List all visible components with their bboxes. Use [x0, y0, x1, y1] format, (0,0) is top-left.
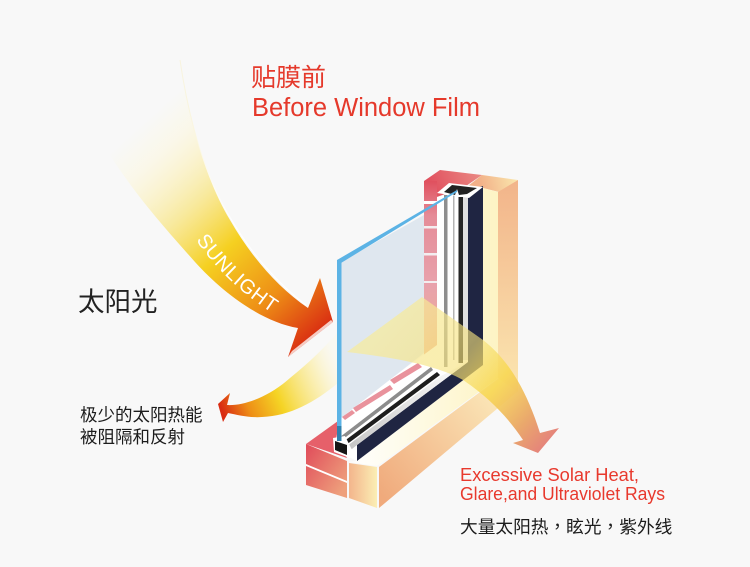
sill long face [379, 366, 517, 508]
cream strip [349, 188, 498, 466]
label: transmitted heat english [460, 465, 665, 504]
title: before window film [251, 64, 480, 122]
sill front orange [349, 463, 377, 508]
top profile [437, 183, 483, 198]
sunlight label: SUNLIGHT [198, 234, 280, 310]
frame top face orange [468, 175, 518, 192]
sill front brick [306, 444, 347, 498]
title: before window film: Before Window Film [252, 94, 480, 122]
title: before window film: 贴膜前 [251, 64, 326, 92]
grey mullion bars [340, 195, 468, 449]
frame top face brick [424, 170, 482, 197]
white frame base [336, 190, 468, 461]
orange column [498, 180, 518, 392]
end profile [333, 426, 351, 458]
reflected arrow [218, 332, 338, 422]
sill top brick [306, 421, 347, 458]
label: transmitted heat english: Excessive Solar Heat, [460, 465, 639, 485]
label: reflected heat: 极少的太阳热能 [80, 405, 202, 425]
sunlight arrow [120, 60, 333, 357]
label: transmitted heat english: Glare,and Ultraviolet Rays [460, 484, 665, 504]
window frame [306, 170, 518, 508]
sill bricks seen through glass [342, 363, 422, 420]
label: transmitted heat chinese: 大量太阳热，眩光，紫外线 [460, 513, 673, 539]
transmitted heat arrow [347, 297, 559, 453]
label: reflected heat: 被阻隔和反射 [80, 427, 185, 447]
brick column [424, 181, 437, 356]
glass pane [337, 190, 457, 441]
label: sunlight chinese: 太阳光 [78, 287, 158, 317]
navy panel [357, 186, 483, 461]
label: reflected heat [80, 405, 202, 447]
